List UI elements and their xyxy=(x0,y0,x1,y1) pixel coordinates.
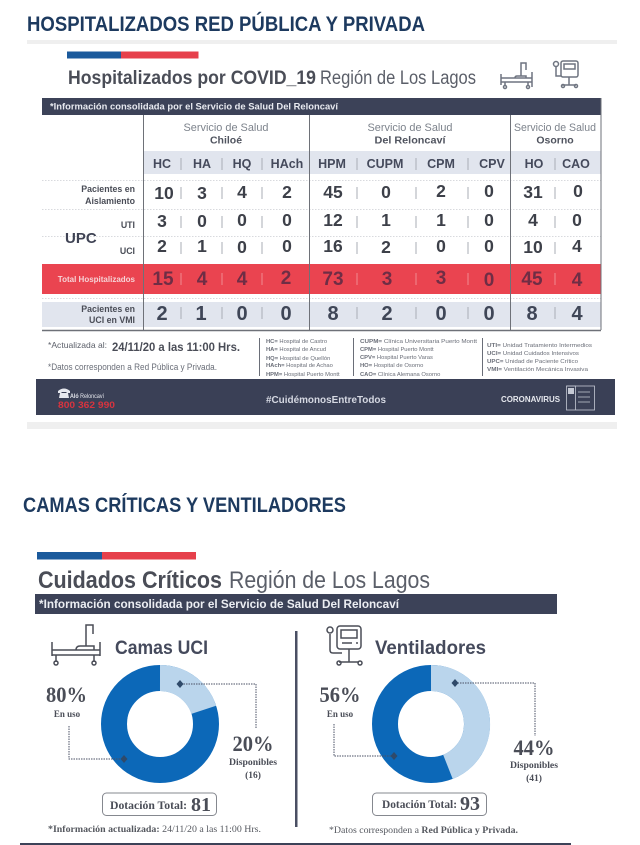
row labels xyxy=(58,184,136,325)
legend abbreviations: UCI= Unidad Cuidados Intensivos xyxy=(487,351,579,357)
update note xyxy=(48,340,240,372)
row labels: UCI xyxy=(120,246,135,256)
row: UCI en VMI: 8 xyxy=(526,303,538,325)
row: aislamiento: 2 xyxy=(282,182,292,202)
column headers: HPM xyxy=(318,157,346,171)
column headers: CUPM xyxy=(367,157,403,171)
row: UCI en VMI: 2 xyxy=(156,303,168,325)
table rules xyxy=(42,98,601,330)
bottom rule xyxy=(20,843,571,845)
column separators xyxy=(181,158,555,319)
row: UCI: 2 xyxy=(381,237,391,257)
row: total hospitalizados: 45 xyxy=(521,269,543,290)
row labels: UTI xyxy=(121,220,135,230)
legend abbreviations: HAch= Hospital de Achao xyxy=(266,363,333,369)
footer band: 800 362 990 xyxy=(58,400,115,410)
legend abbreviations: HA= Hospital de Ancud xyxy=(266,347,326,353)
row: total hospitalizados: 4 xyxy=(237,269,248,290)
row: aislamiento: 3 xyxy=(197,183,207,203)
legend abbreviations: UTI= Unidad Tratamiento Intermedios xyxy=(487,343,592,349)
service header: Osorno: Servicio de Salud xyxy=(514,122,596,134)
row: aislamiento: 0 xyxy=(573,181,583,201)
column headers: HC xyxy=(153,157,171,171)
footer band: #CuidémonosEntreTodos xyxy=(266,394,386,406)
total box: ventiladores xyxy=(372,793,486,816)
row: UCI en VMI: 0 xyxy=(483,303,495,325)
note: actualizada: *Información actualizada: 24/11/20 a las 11:00 Hrs. xyxy=(48,825,261,835)
note: datos: *Datos corresponden a Red Pública y Privada. xyxy=(329,826,518,836)
update note: *Actualizada al: xyxy=(48,340,107,350)
icon: hospital bed xyxy=(501,63,532,88)
footer band: CORONAVIRUS xyxy=(501,395,561,404)
row labels: Total Hospitalizados xyxy=(58,275,136,284)
callout: 56% en uso: En uso xyxy=(327,709,354,719)
service header: Chiloé: Chiloé xyxy=(210,134,242,146)
row: aislamiento xyxy=(154,181,583,203)
update note: *Datos corresponden a Red Pública y Privada. xyxy=(48,362,217,372)
legend abbreviations: HC= Hospital de Castro xyxy=(266,339,327,345)
row: UTI: 4 xyxy=(528,210,538,230)
panel heading: Región de Los Lagos xyxy=(320,68,476,89)
total box: camas: 81 xyxy=(191,794,211,816)
row labels: UPC xyxy=(65,230,97,247)
icon: ventilator xyxy=(327,626,362,665)
row: UCI: 4 xyxy=(572,236,582,256)
icon: hospital bed xyxy=(52,625,100,665)
icon: ministry document xyxy=(566,386,594,410)
row: aislamiento: 31 xyxy=(523,182,543,202)
callout: 56% en uso xyxy=(320,682,398,760)
panel heading: Región de Los Lagos xyxy=(229,567,430,594)
row: total hospitalizados: 15 xyxy=(152,269,174,290)
row: aislamiento: 0 xyxy=(484,181,494,201)
tricolor bar xyxy=(67,52,198,58)
row: total hospitalizados: 2 xyxy=(281,268,291,289)
row: UTI: 12 xyxy=(323,210,343,230)
callout: 20% disponibles: 20% xyxy=(232,731,274,756)
legend abbreviations xyxy=(260,338,592,378)
row: UTI: 1 xyxy=(436,210,446,230)
row: UCI: 0 xyxy=(282,236,292,256)
row: UCI xyxy=(157,236,582,257)
info bar xyxy=(35,594,557,614)
column headers: CPM xyxy=(427,157,455,171)
legend abbreviations: CUPM= Clínica Universitaria Puerto Montt xyxy=(360,339,477,345)
legend abbreviations: CPM= Hospital Puerto Montt xyxy=(360,347,434,353)
vmi row band xyxy=(42,302,601,327)
row: UCI: 2 xyxy=(157,236,167,256)
row: total hospitalizados: 0 xyxy=(484,270,494,291)
row: UCI en VMI: 0 xyxy=(280,303,292,325)
column headers: CAO xyxy=(562,157,590,171)
total box: ventiladores: Dotación Total: xyxy=(382,799,457,811)
footer band: Aló Reloncaví xyxy=(70,393,104,400)
row labels: Pacientes en xyxy=(81,184,135,194)
title: camas críticas: CAMAS CRÍTICAS Y VENTILADORES xyxy=(23,494,346,517)
icon: telephone xyxy=(58,388,70,398)
row: UCI en VMI: 4 xyxy=(571,303,583,325)
row: total hospitalizados: 3 xyxy=(382,269,392,290)
row: UTI xyxy=(157,210,582,231)
icon: ventilator xyxy=(554,61,578,88)
row labels: Aislamiento xyxy=(85,196,136,206)
service header: Chiloé: Servicio de Salud xyxy=(184,122,268,134)
service header: Osorno xyxy=(514,122,596,146)
row: UTI: 1 xyxy=(381,210,391,230)
callout: 80% en uso xyxy=(46,682,128,763)
panel heading: Hospitalizados por COVID_19 xyxy=(68,68,316,89)
column header band xyxy=(144,151,601,174)
service header: Del Reloncaví: Servicio de Salud xyxy=(368,122,452,134)
row: UTI: 0 xyxy=(484,210,494,230)
legend abbreviations: CAO= Clínica Alemana Osorno xyxy=(360,372,440,378)
row: aislamiento: 45 xyxy=(323,182,343,202)
tricolor bar xyxy=(37,552,196,560)
info bar: *Información consolidada por el Servicio de Salud Del Reloncaví xyxy=(39,599,400,611)
row labels: Pacientes en xyxy=(81,304,135,314)
total box: ventiladores: 93 xyxy=(460,793,480,815)
row: UCI: 1 xyxy=(197,236,207,256)
row: UTI: 0 xyxy=(197,211,207,231)
footer band xyxy=(36,379,615,415)
callout: 44% disponibles: 44% xyxy=(514,735,554,760)
service header: Osorno: Osorno xyxy=(536,134,574,146)
donut: camas UCI xyxy=(114,678,206,770)
info bar xyxy=(42,98,601,115)
row: total hospitalizados: 4 xyxy=(197,269,208,290)
column headers: CPV xyxy=(479,157,506,171)
legend abbreviations: HPM= Hospital Puerto Montt xyxy=(266,372,340,378)
row: UCI: 0 xyxy=(436,236,446,256)
callout: 20% disponibles xyxy=(176,680,277,781)
legend abbreviations: VMI= Ventilación Mecánica Invasiva xyxy=(487,367,589,373)
row: UTI: 0 xyxy=(282,210,292,230)
heading: Ventiladores: Ventiladores xyxy=(375,638,486,659)
callout: 44% disponibles xyxy=(452,679,558,784)
panel: cuidados críticos xyxy=(20,552,571,845)
row: UTI: 0 xyxy=(237,210,247,230)
panel: hospitalizados por COVID-19 xyxy=(27,40,617,429)
callout: 56% en uso: 56% xyxy=(320,682,360,707)
donut: ventiladores xyxy=(385,678,477,770)
row: UCI en VMI: 8 xyxy=(327,303,339,325)
heading: Camas UCI: Camas UCI xyxy=(115,638,208,659)
row: total hospitalizados: 73 xyxy=(322,269,344,290)
row: UTI: 0 xyxy=(572,210,582,230)
row: UCI en VMI: 1 xyxy=(195,303,207,325)
total box: camas xyxy=(102,793,216,816)
legend abbreviations: HQ= Hospital de Quellón xyxy=(266,356,330,362)
legend abbreviations: UPC= Unidad de Paciente Crítico xyxy=(487,359,578,365)
row: UCI: 10 xyxy=(523,237,543,257)
row: aislamiento: 0 xyxy=(381,182,391,202)
divider xyxy=(295,631,298,827)
legend abbreviations: CPV= Hospital Puerto Varas xyxy=(360,355,433,361)
row: UTI: 3 xyxy=(157,211,167,231)
row: UCI: 0 xyxy=(484,236,494,256)
callout: 80% en uso: 80% xyxy=(46,682,87,707)
callout: 20% disponibles: (16) xyxy=(245,770,261,781)
row: UCI: 0 xyxy=(237,237,247,257)
total row band xyxy=(42,264,601,294)
row: UCI: 16 xyxy=(323,236,343,256)
panel heading: Cuidados Críticos xyxy=(38,567,222,594)
callout: 44% disponibles: Disponibles xyxy=(510,761,558,771)
title: hospitalizados: HOSPITALIZADOS RED PÚBLICA Y PRIVADA xyxy=(27,12,425,36)
column headers: HA xyxy=(193,157,211,171)
column headers: HAch xyxy=(271,157,303,171)
column headers xyxy=(153,157,590,171)
column headers: HO xyxy=(525,157,544,171)
callout: 44% disponibles: (41) xyxy=(526,773,542,784)
row: total hospitalizados: 3 xyxy=(436,268,446,289)
row: UCI en VMI: 0 xyxy=(236,303,248,325)
column headers: HQ xyxy=(233,157,252,171)
row: aislamiento: 10 xyxy=(154,183,174,203)
row: aislamiento: 2 xyxy=(436,181,446,201)
row: total hospitalizados: 4 xyxy=(572,270,583,291)
update note: 24/11/20 a las 11:00 Hrs. xyxy=(112,340,240,354)
info bar: *Información consolidada por el Servicio de Salud Del Reloncaví xyxy=(50,102,338,112)
service header: Del Reloncaví xyxy=(368,122,452,146)
row: aislamiento: 4 xyxy=(237,182,247,202)
callout: 20% disponibles: Disponibles xyxy=(229,758,277,768)
row: UCI en VMI: 0 xyxy=(435,303,447,325)
service header: Del Reloncaví: Del Reloncaví xyxy=(374,134,447,146)
total box: camas: Dotación Total: xyxy=(110,800,187,812)
legend abbreviations: HO= Hospital de Osorno xyxy=(360,363,423,369)
row labels: UCI en VMI xyxy=(89,315,135,325)
row: UCI en VMI: 2 xyxy=(381,303,393,325)
service header: Chiloé xyxy=(184,122,268,146)
row: total hospitalizados xyxy=(152,268,583,291)
callout: 80% en uso: En uso xyxy=(54,709,81,719)
row: UCI en VMI xyxy=(156,303,583,325)
